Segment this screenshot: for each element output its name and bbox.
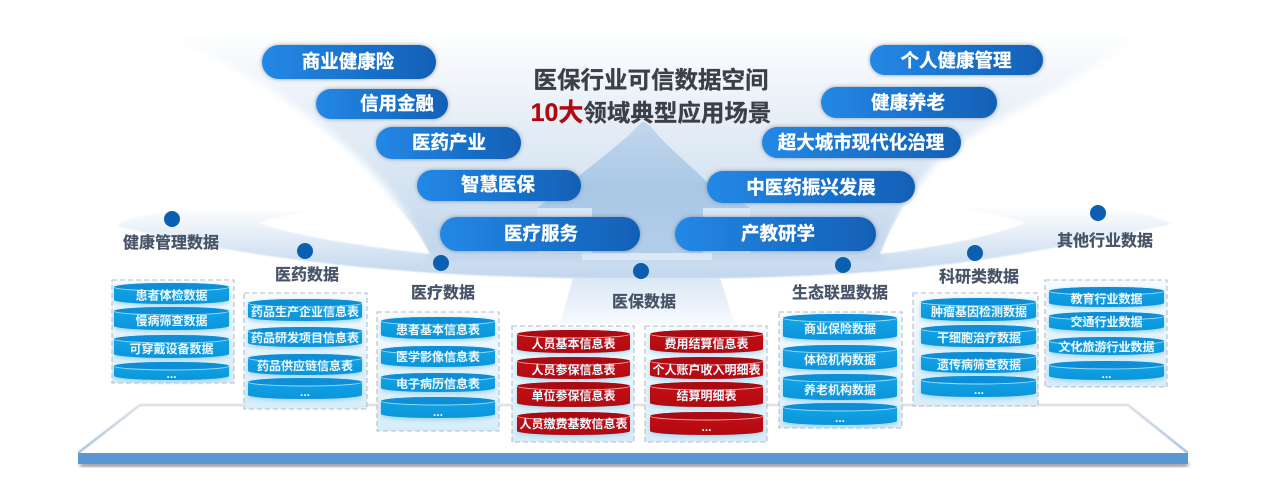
database: 结算明细表: 结算明细表 xyxy=(676,388,737,403)
pill: 健康养老: 健康养老 xyxy=(871,92,945,113)
group: 健康管理数据 xyxy=(112,211,234,383)
database: more xyxy=(248,378,362,399)
database: more xyxy=(381,397,495,419)
database: 药品生产企业信息表: 药品生产企业信息表 xyxy=(251,304,359,319)
group: 其他行业数据: 其他行业数据 xyxy=(1057,232,1153,250)
group: 生态联盟数据: 生态联盟数据 xyxy=(792,283,888,302)
database: 电子病历信息表: 电子病历信息表 xyxy=(396,376,480,391)
scenario pills left xyxy=(262,45,640,251)
database: 教育行业数据 xyxy=(1049,287,1164,307)
database: 遗传病筛查数据: 遗传病筛查数据 xyxy=(937,357,1021,372)
database: more: ... xyxy=(166,367,177,381)
group: 医药数据 xyxy=(244,243,367,409)
column: 医保数据 left xyxy=(512,326,634,442)
database: 医学影像信息表: 医学影像信息表 xyxy=(396,349,480,364)
scenario pills right xyxy=(675,45,1043,251)
database: 商业保险数据: 商业保险数据 xyxy=(804,321,876,336)
column: 医保数据 right xyxy=(645,326,767,442)
database: 患者体检数据 xyxy=(114,283,229,304)
pill: 健康养老 xyxy=(821,87,997,118)
pill: 个人健康管理: 个人健康管理 xyxy=(900,50,1012,71)
database: 人员基本信息表: 人员基本信息表 xyxy=(531,336,616,351)
database: 干细胞治疗数据 xyxy=(921,325,1036,347)
database: 个人账户收入明细表: 个人账户收入明细表 xyxy=(652,362,761,377)
white inner ellipse: left xyxy=(258,205,430,254)
group: 医药数据: 医药数据 xyxy=(275,266,339,284)
pill: 中医药振兴发展 xyxy=(707,171,915,203)
pill: 产教研学: 产教研学 xyxy=(741,223,815,244)
database: 养老机构数据 xyxy=(783,374,897,400)
database: more xyxy=(783,403,897,425)
database: 慢病筛查数据: 慢病筛查数据 xyxy=(135,313,208,328)
database: 人员缴费基数信息表: 人员缴费基数信息表 xyxy=(519,416,628,431)
database: 交通行业数据: 交通行业数据 xyxy=(1070,314,1143,329)
database: 文化旅游行业数据 xyxy=(1049,337,1164,355)
pill: 超大城市现代化治理: 超大城市现代化治理 xyxy=(778,132,945,153)
database: 交通行业数据 xyxy=(1049,312,1164,331)
pill: 商业健康险: 商业健康险 xyxy=(302,51,395,72)
database: 患者体检数据: 患者体检数据 xyxy=(135,288,208,302)
database: 体检机构数据: 体检机构数据 xyxy=(804,352,876,367)
database: 可穿戴设备数据: 可穿戴设备数据 xyxy=(129,341,214,356)
database: 患者基本信息表 xyxy=(381,317,495,339)
pill: 信用金融: 信用金融 xyxy=(360,93,434,114)
group: 科研类数据 xyxy=(913,245,1038,406)
database: more: ... xyxy=(300,385,310,399)
group: 医保数据 xyxy=(512,263,767,442)
database: 文化旅游行业数据: 文化旅游行业数据 xyxy=(1058,339,1155,354)
database: 体检机构数据 xyxy=(783,345,897,370)
database: 遗传病筛查数据 xyxy=(921,352,1036,373)
database: 患者基本信息表: 患者基本信息表 xyxy=(396,322,480,337)
group: 医疗数据 xyxy=(377,255,499,431)
lighter strip under arrow xyxy=(582,253,712,260)
database: 药品研发项目信息表 xyxy=(248,327,362,347)
background funnel xyxy=(0,20,1267,300)
pill: 中医药振兴发展: 中医药振兴发展 xyxy=(746,177,876,198)
database: 单位参保信息表: 单位参保信息表 xyxy=(531,388,616,403)
database: 医学影像信息表 xyxy=(381,346,495,367)
database: 药品研发项目信息表: 药品研发项目信息表 xyxy=(251,330,359,345)
database: more: ... xyxy=(835,411,845,425)
database: 费用结算信息表: 费用结算信息表 xyxy=(664,336,749,351)
database: 人员参保信息表: 人员参保信息表 xyxy=(531,362,616,377)
pill: 智慧医保: 智慧医保 xyxy=(461,174,535,195)
database: more: ... xyxy=(974,383,984,397)
group: 健康管理数据: 健康管理数据 xyxy=(123,233,219,252)
database: 药品生产企业信息表 xyxy=(248,299,362,321)
database: 干细胞治疗数据: 干细胞治疗数据 xyxy=(937,330,1021,345)
white inner ellipse: right xyxy=(880,205,1025,254)
database: 肿瘤基因检测数据: 肿瘤基因检测数据 xyxy=(931,304,1027,319)
database: more xyxy=(114,362,229,381)
title xyxy=(531,67,771,127)
database: 药品供应链信息表: 药品供应链信息表 xyxy=(257,358,353,373)
group: 其他行业数据 xyxy=(1045,205,1167,387)
group: 生态联盟数据 xyxy=(779,257,902,428)
pill: 商业健康险 xyxy=(262,45,436,79)
pill: 产教研学 xyxy=(675,217,876,251)
database: 教育行业数据: 教育行业数据 xyxy=(1070,291,1143,306)
pill: 个人健康管理 xyxy=(870,45,1043,75)
database: more xyxy=(1049,361,1164,381)
database: more: ... xyxy=(1101,367,1112,381)
database: 电子病历信息表 xyxy=(381,373,495,392)
database: more: ... xyxy=(433,405,443,419)
database: more xyxy=(921,376,1036,397)
group: 医保数据: 医保数据 xyxy=(612,293,676,311)
pill: 超大城市现代化治理 xyxy=(762,127,961,158)
curved band xyxy=(117,206,1172,279)
pill: 医药产业 xyxy=(376,127,521,159)
title: 10大领域典型应用场景 xyxy=(531,99,771,127)
database: 药品供应链信息表 xyxy=(248,354,362,375)
database: 商业保险数据 xyxy=(783,314,897,340)
group: 科研类数据: 科研类数据 xyxy=(939,268,1019,286)
pale patch behind arrow xyxy=(537,208,750,253)
database: 养老机构数据: 养老机构数据 xyxy=(804,382,876,397)
central upward arrow xyxy=(537,122,750,253)
title: 医保行业可信数据空间 xyxy=(534,67,768,93)
database: 慢病筛查数据 xyxy=(114,307,229,330)
pill: 信用金融 xyxy=(316,89,448,119)
base platform xyxy=(78,405,1188,467)
database: 肿瘤基因检测数据 xyxy=(921,298,1036,321)
pill: 医疗服务: 医疗服务 xyxy=(504,223,578,244)
database: 可穿戴设备数据 xyxy=(114,335,229,358)
pill: 智慧医保 xyxy=(417,170,581,201)
group: 医疗数据: 医疗数据 xyxy=(411,283,475,302)
lower arrow trunk xyxy=(560,278,735,324)
pill: 医疗服务 xyxy=(440,217,640,251)
database: more: ... xyxy=(701,420,712,434)
pill: 医药产业: 医药产业 xyxy=(412,132,486,153)
